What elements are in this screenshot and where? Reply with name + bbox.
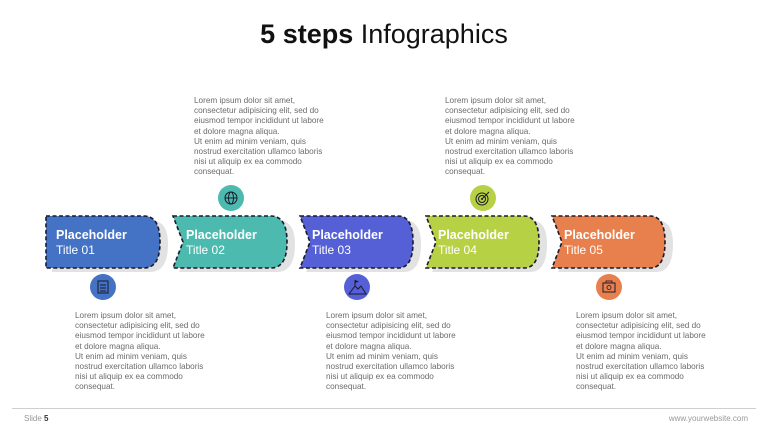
text: step 2	[194, 96, 324, 176]
text: step 2: eiusmod tempor incididunt ut labore	[194, 116, 324, 125]
icon: target	[470, 185, 496, 211]
text: step 4: Ut enim ad minim veniam, quis	[445, 137, 557, 146]
title: 5 steps Infographics	[260, 19, 508, 49]
card 5: Placeholder	[564, 228, 635, 242]
card 3	[300, 216, 421, 272]
footer line	[12, 408, 756, 409]
text: step 2: consequat.	[194, 167, 234, 176]
text: step 3: consequat.	[326, 382, 366, 391]
text: step 2: nostrud exercitation ullamco laboris	[194, 147, 322, 156]
text: step 5: Ut enim ad minim veniam, quis	[576, 352, 688, 361]
text: step 4: consectetur adipisicing elit, sed do	[445, 106, 570, 115]
card 1: Placeholder	[56, 228, 127, 242]
text: step 4	[445, 96, 575, 176]
text: step 5	[576, 311, 706, 391]
text: step 5: consequat.	[576, 382, 616, 391]
icon: clipboard	[90, 274, 116, 300]
text: step 4: nisi ut aliquip ex ea commodo	[445, 157, 553, 166]
text: step 4: nostrud exercitation ullamco laboris	[445, 147, 573, 156]
text: step 5: consectetur adipisicing elit, sed do	[576, 321, 701, 330]
text: step 5: nisi ut aliquip ex ea commodo	[576, 372, 684, 381]
text: step 1: nisi ut aliquip ex ea commodo	[75, 372, 183, 381]
text: step 1: et dolore magna aliqua.	[75, 342, 161, 351]
card 4: Placeholder	[438, 228, 509, 242]
text: step 2: Lorem ipsum dolor sit amet,	[194, 96, 295, 105]
card 4	[426, 216, 547, 272]
icon: mountain flag	[344, 274, 370, 300]
text: step 2: et dolore magna aliqua.	[194, 127, 280, 136]
card 1	[46, 216, 168, 272]
text: step 5: nostrud exercitation ullamco laboris	[576, 362, 704, 371]
card 1: Title 01	[56, 243, 95, 257]
text: step 3: eiusmod tempor incididunt ut labore	[326, 331, 456, 340]
icon: globe	[218, 185, 244, 211]
text: step 4: eiusmod tempor incididunt ut labore	[445, 116, 575, 125]
text: step 2: nisi ut aliquip ex ea commodo	[194, 157, 302, 166]
icon: first aid kit	[596, 274, 622, 300]
text: step 3	[326, 311, 456, 391]
card 5	[552, 216, 673, 272]
text: step 5: Lorem ipsum dolor sit amet,	[576, 311, 677, 320]
text: step 3: et dolore magna aliqua.	[326, 342, 412, 351]
text: step 2: Ut enim ad minim veniam, quis	[194, 137, 306, 146]
card 5: Title 05	[564, 243, 603, 257]
footer: slide number: Slide 5	[24, 414, 48, 423]
card 4: Title 04	[438, 243, 477, 257]
text: step 4: consequat.	[445, 167, 485, 176]
card 3: Placeholder	[312, 228, 383, 242]
card 2	[173, 216, 295, 272]
text: step 1: Ut enim ad minim veniam, quis	[75, 352, 187, 361]
text: step 5: et dolore magna aliqua.	[576, 342, 662, 351]
text: step 1: consectetur adipisicing elit, sed do	[75, 321, 200, 330]
text: step 4: et dolore magna aliqua.	[445, 127, 531, 136]
text: step 2: consectetur adipisicing elit, sed do	[194, 106, 319, 115]
text: step 3: Ut enim ad minim veniam, quis	[326, 352, 438, 361]
card 3: Title 03	[312, 243, 351, 257]
text: step 3: consectetur adipisicing elit, sed do	[326, 321, 451, 330]
text: step 1	[75, 311, 205, 391]
text: step 1: Lorem ipsum dolor sit amet,	[75, 311, 176, 320]
text: step 3: nisi ut aliquip ex ea commodo	[326, 372, 434, 381]
text: step 1: nostrud exercitation ullamco laboris	[75, 362, 203, 371]
footer: website: www.yourwebsite.com	[669, 414, 748, 423]
text: step 1: consequat.	[75, 382, 115, 391]
text: step 4: Lorem ipsum dolor sit amet,	[445, 96, 546, 105]
card 2: Placeholder	[186, 228, 257, 242]
text: step 3: nostrud exercitation ullamco laboris	[326, 362, 454, 371]
text: step 5: eiusmod tempor incididunt ut labore	[576, 331, 706, 340]
text: step 3: Lorem ipsum dolor sit amet,	[326, 311, 427, 320]
card 2: Title 02	[186, 243, 225, 257]
text: step 1: eiusmod tempor incididunt ut labore	[75, 331, 205, 340]
